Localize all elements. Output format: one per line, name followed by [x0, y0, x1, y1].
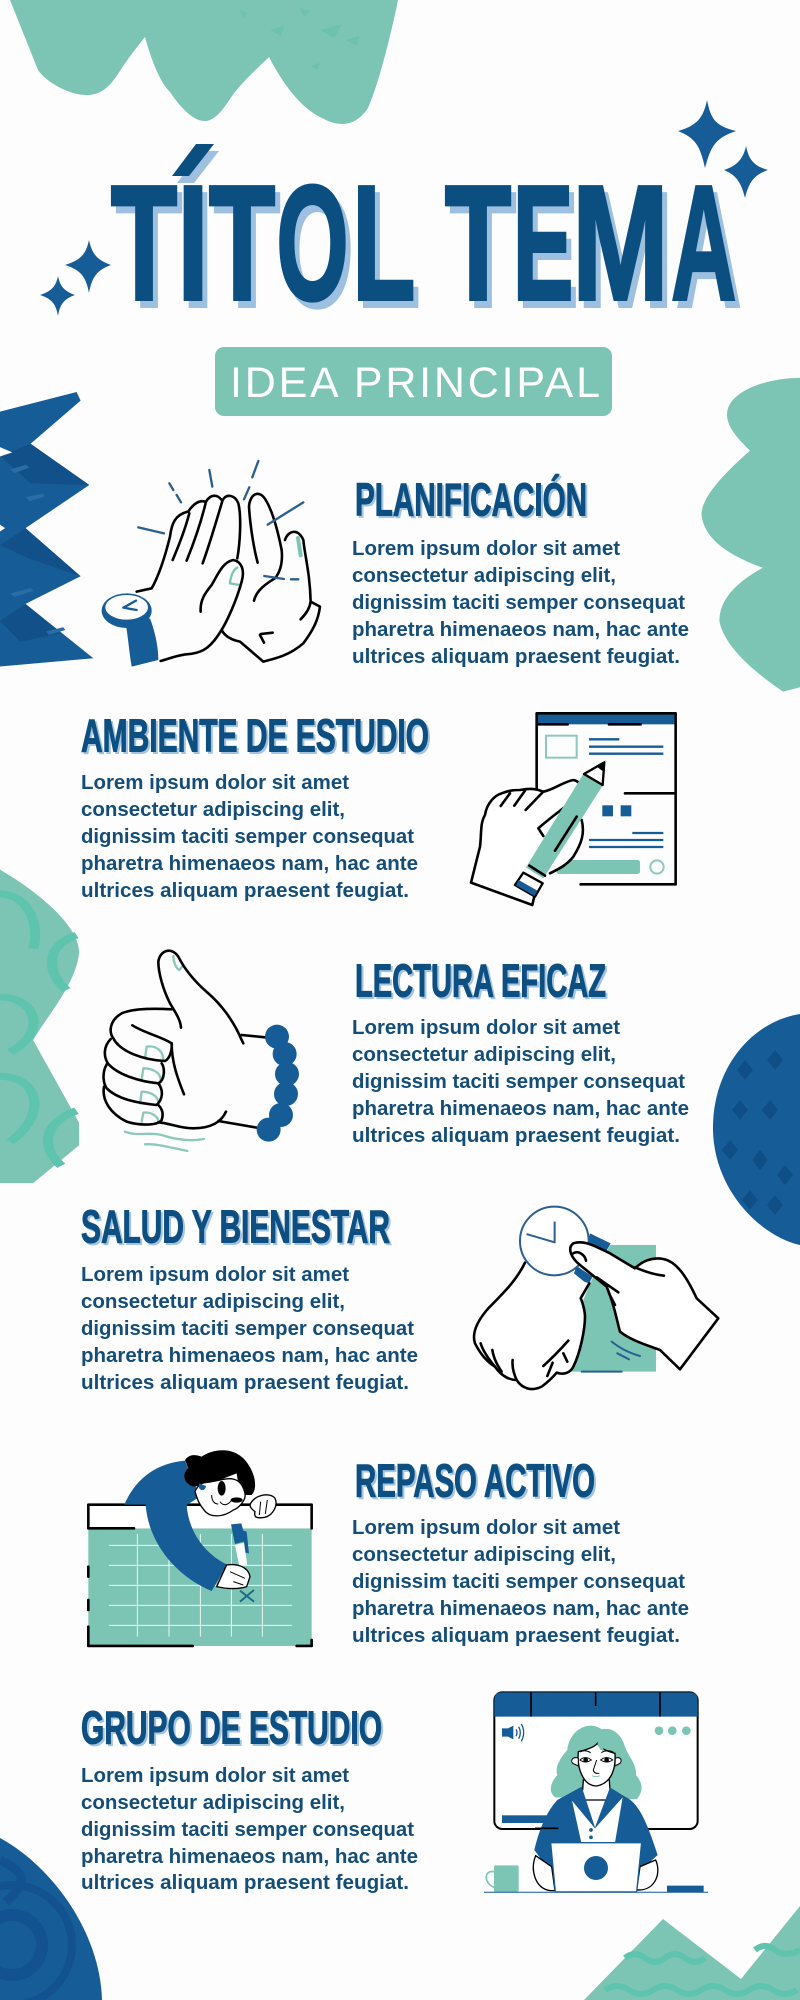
blue zigzag shape left: [0, 392, 93, 667]
body text: lectura eficaz: consectetur adipiscing elit,: [352, 1044, 616, 1066]
subtitle pill: IDEA PRINCIPAL: [230, 359, 600, 407]
heading: planificación: PLANIFICACIÓN: [355, 474, 587, 526]
sparkle: top right large: [678, 100, 736, 168]
body text: grupo de estudio: Lorem ipsum dolor sit amet: [81, 1765, 349, 1787]
body text: salud y bienestar: [81, 1264, 418, 1394]
heading: lectura eficaz: LECTURA EFICAZ: [355, 954, 606, 1006]
top teal blob: [10, 0, 398, 124]
body text: planificación: ultrices aliquam praesent feugiat.: [352, 646, 680, 668]
icon: document with hand and pencil: [471, 713, 676, 905]
body text: planificación: consectetur adipiscing elit,: [352, 565, 616, 587]
body text: salud y bienestar: dignissim taciti semper consequat: [81, 1318, 414, 1340]
sparkle: left large: [65, 240, 111, 293]
section: grupo de estudio: [81, 1692, 708, 1894]
body text: ambiente de estudio: ultrices aliquam praesent feugiat.: [81, 880, 409, 902]
heading: repaso activo: REPASO ACTIVO: [355, 1454, 595, 1506]
heading: grupo de estudio: GRUPO DE ESTUDIO: [81, 1702, 382, 1754]
body text: planificación: pharetra himenaeos nam, hac ante: [352, 619, 689, 641]
body text: repaso activo: dignissim taciti semper consequat: [352, 1571, 685, 1593]
body text: ambiente de estudio: pharetra himenaeos nam, hac ante: [81, 853, 418, 875]
title: A: [671, 152, 736, 334]
title: T: [209, 152, 275, 334]
section: lectura eficaz: [104, 951, 689, 1151]
title: T: [445, 152, 511, 334]
body text: grupo de estudio: ultrices aliquam praesent feugiat.: [81, 1872, 409, 1894]
body text: planificación: dignissim taciti semper consequat: [352, 592, 685, 614]
body text: planificación: [352, 538, 689, 668]
body text: repaso activo: Lorem ipsum dolor sit amet: [352, 1517, 620, 1539]
body text: grupo de estudio: consectetur adipiscing elit,: [81, 1792, 345, 1814]
body text: repaso activo: [352, 1517, 689, 1647]
body text: ambiente de estudio: Lorem ipsum dolor sit amet: [81, 772, 349, 794]
body text: grupo de estudio: [81, 1765, 418, 1894]
heading: salud y bienestar: SALUD Y BIENESTAR: [81, 1200, 390, 1252]
body text: grupo de estudio: pharetra himenaeos nam, hac ante: [81, 1846, 418, 1868]
icon: thumbs up hand with bracelet: [104, 951, 299, 1151]
body text: salud y bienestar: Lorem ipsum dolor sit amet: [81, 1264, 349, 1286]
title: M: [572, 152, 669, 334]
section: salud y bienestar: [81, 1200, 718, 1394]
body text: lectura eficaz: Lorem ipsum dolor sit amet: [352, 1017, 620, 1039]
body text: repaso activo: consectetur adipiscing elit,: [352, 1544, 616, 1566]
body text: ambiente de estudio: consectetur adipiscing elit,: [81, 799, 345, 821]
teal blob right top: [702, 378, 800, 692]
section: ambiente de estudio: [81, 710, 676, 905]
heading: ambiente de estudio: AMBIENTE DE ESTUDIO: [81, 710, 429, 762]
title: L: [352, 152, 414, 334]
icon: hand tapping wrist watch: [474, 1207, 718, 1389]
body text: grupo de estudio: dignissim taciti semper consequat: [81, 1819, 414, 1841]
body text: ambiente de estudio: [81, 772, 418, 902]
teal mountains bottom right: [584, 1906, 800, 2000]
title: [110, 144, 740, 310]
body text: salud y bienestar: consectetur adipiscing elit,: [81, 1291, 345, 1313]
icon: person marking a calendar: [88, 1450, 312, 1646]
body text: lectura eficaz: pharetra himenaeos nam, hac ante: [352, 1098, 689, 1120]
title: E: [513, 152, 574, 334]
section: planificación: [102, 461, 689, 668]
teal blob left middle: [0, 870, 79, 1183]
body text: lectura eficaz: [352, 1017, 689, 1147]
body text: repaso activo: pharetra himenaeos nam, hac ante: [352, 1598, 689, 1620]
body text: lectura eficaz: ultrices aliquam praesent feugiat.: [352, 1125, 680, 1147]
icon: high five hands with watch: [102, 461, 320, 667]
sparkle: left small: [40, 276, 75, 316]
title: O: [276, 152, 349, 334]
body text: salud y bienestar: pharetra himenaeos nam, hac ante: [81, 1345, 418, 1367]
subtitle pill: [215, 347, 612, 416]
blue round blob right: [713, 1014, 800, 1245]
title: Í: [177, 152, 212, 334]
blue round blob bottom left: [0, 1838, 102, 2000]
body text: ambiente de estudio: dignissim taciti semper consequat: [81, 826, 414, 848]
body text: planificación: Lorem ipsum dolor sit amet: [352, 538, 620, 560]
title: T: [111, 152, 177, 334]
body text: repaso activo: ultrices aliquam praesent feugiat.: [352, 1625, 680, 1647]
section: repaso activo: [88, 1450, 689, 1647]
sparkle: top right small: [724, 146, 768, 198]
body text: salud y bienestar: ultrices aliquam praesent feugiat.: [81, 1372, 409, 1394]
icon: video call window with woman and laptop: [484, 1692, 708, 1892]
body text: lectura eficaz: dignissim taciti semper consequat: [352, 1071, 685, 1093]
